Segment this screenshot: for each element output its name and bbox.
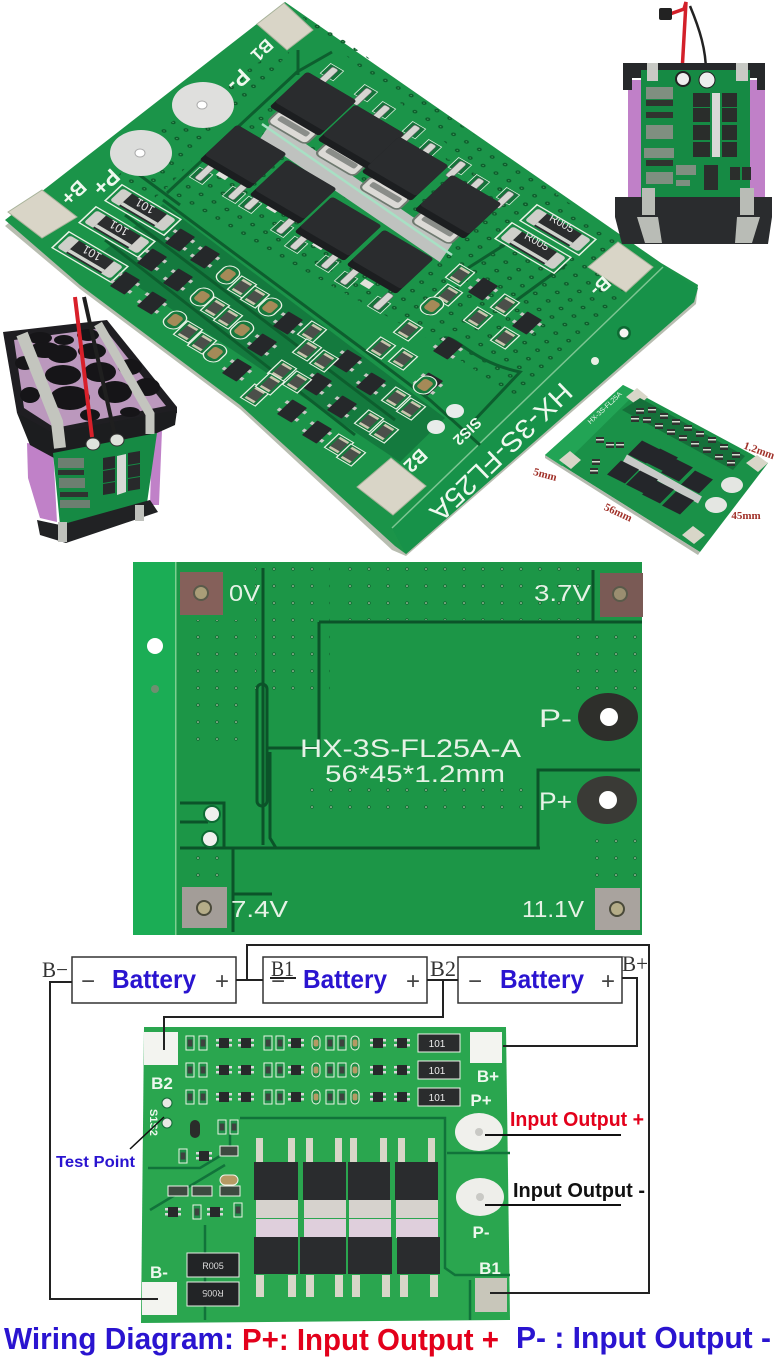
- purple cells: [628, 80, 644, 198]
- battery 3: +: [601, 968, 615, 995]
- copper traces: [105, 50, 565, 445]
- silkscreen labels: P-: [539, 705, 572, 733]
- footer caption: [4, 1320, 771, 1357]
- battery 1: −: [81, 968, 95, 995]
- wiring diagram: [42, 945, 649, 1323]
- resistors R005: R005: [202, 1261, 224, 1271]
- light edge strip: [133, 562, 175, 935]
- wires: [75, 297, 115, 437]
- resistors 101: 101: [107, 217, 131, 239]
- battery 3: Battery: [500, 964, 585, 994]
- control circuit zone: [95, 204, 445, 462]
- callout: test point: Test Point: [56, 1154, 136, 1171]
- callout: test point: [56, 1117, 164, 1171]
- mounting holes in strip: [591, 326, 631, 365]
- photo: dimensioned board: [532, 385, 776, 555]
- silkscreen labels: B-: [150, 1263, 168, 1282]
- small chips: [107, 227, 545, 445]
- wires: [50, 945, 649, 1299]
- callout: input output plus: Input Output +: [510, 1109, 644, 1131]
- battery 1: [72, 957, 236, 1003]
- pack PCB components: [644, 72, 751, 190]
- terminal labels: B1: [271, 956, 294, 981]
- resistors 101: [52, 185, 181, 282]
- silkscreen labels: [56, 35, 614, 527]
- silkscreen labels: B+: [477, 1067, 499, 1086]
- test holes and SIS labels: [147, 1098, 172, 1136]
- edge strip: [392, 267, 698, 554]
- MOSFET legs: [189, 64, 520, 313]
- dimension labels: 1.2mm: [742, 440, 776, 462]
- photo: PCB back side: [133, 562, 643, 935]
- PCB traces: [148, 1118, 510, 1320]
- battery 2: +: [406, 968, 420, 995]
- MOSFET tabs: [256, 1200, 438, 1238]
- dimension labels: 56mm: [602, 501, 634, 525]
- battery 1: Battery: [112, 964, 197, 994]
- small board chips: [607, 440, 713, 514]
- small resistors and capacitors: [160, 263, 520, 466]
- silkscreen labels: B-: [585, 271, 614, 300]
- straps: [647, 63, 748, 81]
- small board discs: [705, 477, 743, 513]
- footer caption: P+: Input Output +: [242, 1322, 499, 1357]
- P- and P+ lugs: [577, 693, 638, 824]
- lugs: [86, 434, 124, 450]
- test points: [427, 404, 464, 434]
- silkscreen labels: P-: [472, 1223, 490, 1242]
- small board: [545, 385, 768, 552]
- silkscreen labels: 11.1V: [522, 896, 585, 922]
- corner pads: [8, 3, 653, 515]
- wires: [659, 2, 706, 72]
- resistors R005: [495, 205, 596, 273]
- battery 2: −: [271, 968, 285, 995]
- silver copper band between MOSFETs: [262, 124, 452, 255]
- callout: input output minus: Input Output -: [513, 1180, 645, 1202]
- terminal labels: B2: [430, 956, 456, 981]
- resistors R005: R005: [547, 212, 576, 236]
- control components: [165, 1120, 242, 1219]
- pack PCB: [641, 70, 750, 198]
- battery 3: [458, 957, 622, 1003]
- lower holder: [37, 500, 158, 543]
- footer caption: Wiring Diagram:: [4, 1321, 234, 1356]
- board edge: [5, 2, 698, 556]
- diagram PCB: [141, 1027, 510, 1323]
- board edge: [545, 455, 700, 555]
- battery 2: [263, 957, 427, 1003]
- resistors 101: 101: [80, 242, 104, 264]
- silkscreen labels: P+: [88, 164, 125, 201]
- black holder cells: [15, 329, 160, 421]
- pack chips: [58, 451, 140, 508]
- board: [133, 562, 642, 935]
- traces: [180, 568, 642, 932]
- holder frame bottom: [615, 197, 772, 244]
- silkscreen labels: 0V: [229, 580, 261, 606]
- pads: [180, 572, 643, 930]
- silkscreen labels: 7.4V: [231, 896, 289, 922]
- battery 3: −: [468, 968, 482, 995]
- footer caption: P- : Input Output -: [516, 1320, 771, 1355]
- silkscreen labels: [229, 580, 592, 922]
- resistors 101: 101: [429, 1039, 446, 1050]
- right cell sliver: [150, 430, 162, 505]
- terminal labels: B−: [42, 957, 68, 982]
- pack PCB: [53, 433, 157, 525]
- silkscreen labels: B2: [399, 444, 431, 476]
- silkscreen labels: [150, 1067, 501, 1282]
- dimension labels: [532, 440, 776, 525]
- battery 2: Battery: [303, 964, 388, 994]
- straps: [22, 324, 150, 448]
- discs P+ and P-: [455, 1113, 504, 1216]
- silkscreen labels: P-: [222, 64, 255, 97]
- silkscreen labels: B+: [56, 175, 90, 209]
- small board control zone: [622, 398, 745, 470]
- resistors 101: 101: [429, 1093, 446, 1104]
- board outline: [5, 2, 698, 554]
- silkscreen labels: B2: [151, 1074, 173, 1093]
- silkscreen labels: B1: [479, 1259, 501, 1278]
- silkscreen labels: B1: [247, 35, 277, 65]
- resistors R005: [187, 1253, 239, 1306]
- small board strip: [545, 385, 637, 466]
- silkscreen labels: P+: [470, 1091, 492, 1110]
- terminal labels: B+: [622, 951, 648, 976]
- lower straps: [58, 505, 144, 542]
- photo: main PCB top view: [5, 2, 698, 556]
- silkscreen labels: HX-3S-FL25A: [424, 377, 578, 527]
- dimension labels: 5mm: [532, 466, 558, 484]
- resistors 101: 101: [133, 195, 157, 217]
- MOSFET chips: [254, 1162, 440, 1274]
- small board label: HX-3S-FL25A: [587, 391, 624, 426]
- left cell: [27, 443, 57, 522]
- resistors 101: 101: [429, 1066, 446, 1077]
- resistors R005: R005: [522, 230, 551, 254]
- small board tabs: [625, 458, 700, 500]
- component rows: [186, 1036, 410, 1104]
- silkscreen labels: P+: [539, 788, 572, 816]
- resistors 101: [418, 1034, 460, 1106]
- silkscreen labels: 56*45*1.2mm: [325, 761, 505, 788]
- MOSFET legs: [256, 1138, 438, 1297]
- small board top components: [590, 407, 740, 474]
- via field: [105, 15, 655, 400]
- test holes: [202, 806, 220, 847]
- silkscreen labels: HX-3S-FL25A-A: [300, 735, 521, 763]
- photo: battery pack top right: [615, 2, 772, 244]
- lower straps: [637, 188, 760, 243]
- MOSFET tabs: [267, 110, 463, 245]
- small board pads: [559, 388, 768, 544]
- strip holes: [147, 638, 163, 693]
- via groups: [183, 565, 642, 890]
- silkscreen labels: SIS2: [449, 414, 485, 448]
- test holes and SIS labels: S1S2: [147, 1109, 159, 1136]
- discs P+ and P-: [110, 82, 234, 176]
- pack top: [3, 320, 177, 437]
- terminal labels: [42, 951, 648, 982]
- PCB pads: [142, 1032, 507, 1315]
- silkscreen labels: 3.7V: [534, 580, 592, 606]
- battery 1: +: [215, 968, 229, 995]
- side holder: [17, 410, 177, 458]
- dimension labels: 45mm: [731, 510, 761, 522]
- MOSFET chips: [199, 72, 502, 294]
- photo: battery pack left: [3, 297, 177, 543]
- resistors R005: R005: [202, 1288, 224, 1298]
- holder frame top: [623, 63, 765, 90]
